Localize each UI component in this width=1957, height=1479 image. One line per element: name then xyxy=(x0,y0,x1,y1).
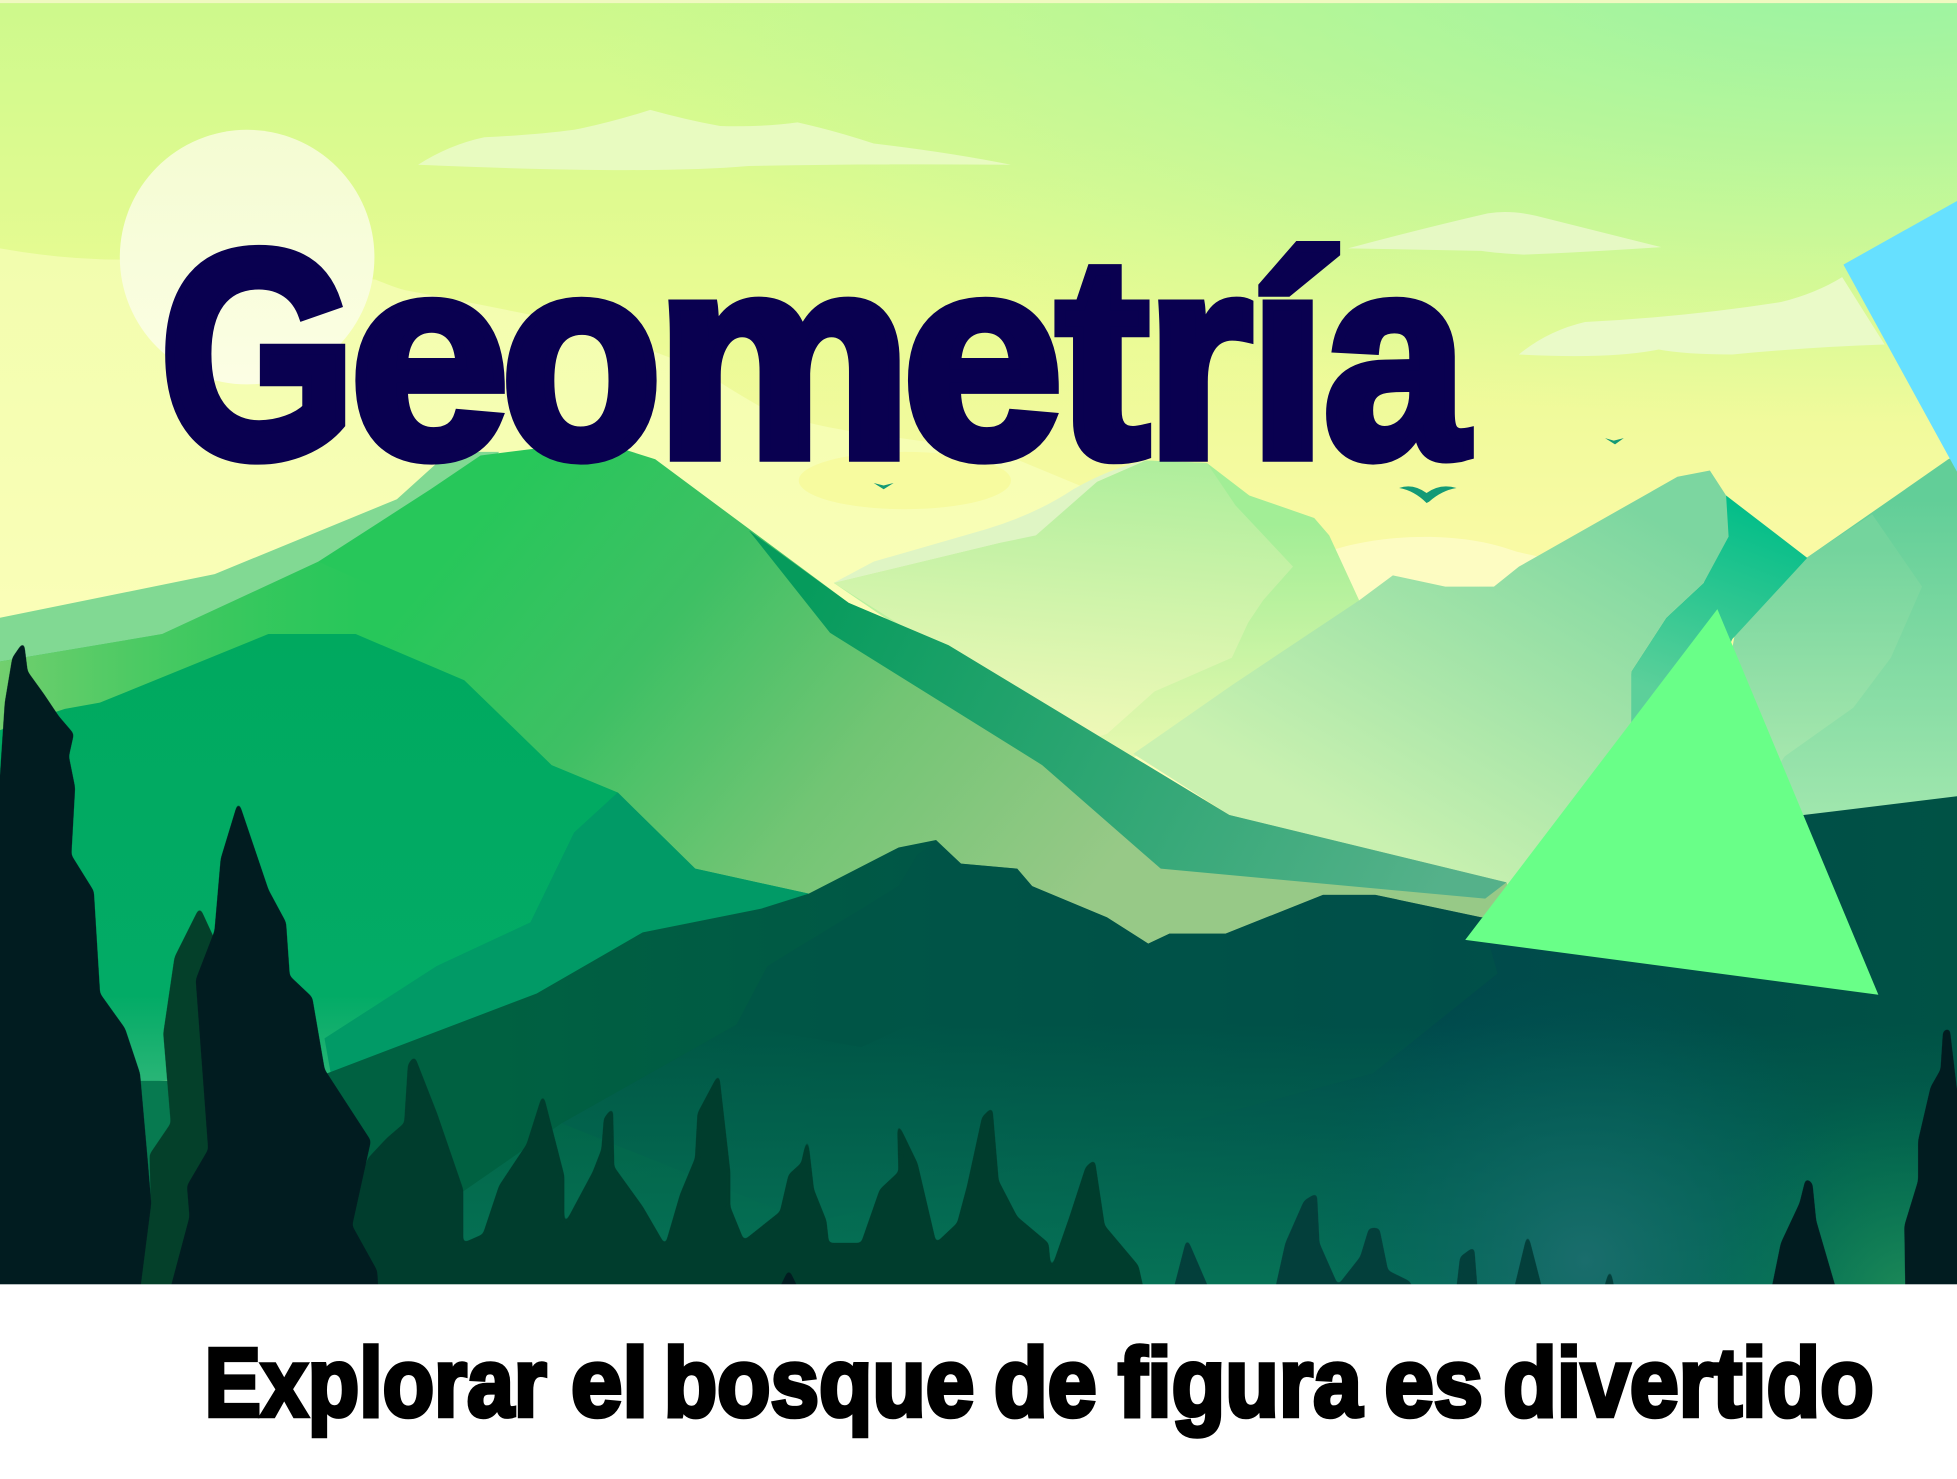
subtitle: figura xyxy=(1118,1328,1363,1437)
title: a xyxy=(1324,197,1469,517)
title: o xyxy=(501,197,662,517)
tree: far left xyxy=(0,642,151,1311)
subtitle: divertido xyxy=(1503,1328,1874,1437)
blue triangle xyxy=(1843,201,1957,472)
mountain: central inner facet xyxy=(834,461,1293,749)
lower left valley xyxy=(0,1081,374,1286)
yellow sky glow xyxy=(799,452,1011,509)
title: í xyxy=(1248,197,1337,517)
mountain: central far xyxy=(834,461,1359,761)
mountain: front left xyxy=(0,634,809,1086)
birds xyxy=(874,438,1624,503)
tree: right edge xyxy=(1905,1028,1957,1311)
mountain: left lit lip xyxy=(0,562,374,749)
mountain: dark ridge xyxy=(749,530,1506,899)
cream cloud behind mountains xyxy=(1335,537,1573,612)
cloud top right xyxy=(1348,212,1661,255)
mountain: teal gully xyxy=(1623,495,1807,774)
mountain: main xyxy=(0,447,1535,998)
sun xyxy=(120,130,374,384)
trees: mid row xyxy=(352,1056,1148,1311)
title: m xyxy=(655,197,912,517)
mountain: mid dark range xyxy=(287,796,1957,1286)
mountain: mid range shaded facet xyxy=(562,841,1498,1223)
subtitle: bosque xyxy=(664,1328,974,1437)
title: t xyxy=(1057,197,1149,517)
subtitle: el xyxy=(571,1328,648,1437)
green glow xyxy=(1697,1073,1957,1286)
mountain: right light facet xyxy=(1710,514,1922,811)
pale sky band xyxy=(0,248,1248,799)
white footer band xyxy=(0,1284,1957,1479)
teal glow xyxy=(1248,974,1957,1286)
tree: bottom bump xyxy=(769,1269,809,1311)
foreground slope lighter xyxy=(327,974,1957,1286)
subtitle: de xyxy=(994,1328,1097,1437)
green triangle xyxy=(1465,609,1878,995)
subtitle: es xyxy=(1385,1328,1483,1437)
trees: small distant row xyxy=(1168,1193,1619,1311)
title: G xyxy=(160,190,356,519)
trees: dark left pair and right silhouettes xyxy=(0,642,1957,1311)
title: e xyxy=(902,197,1063,517)
title: r xyxy=(1146,197,1252,517)
mountain: back left xyxy=(0,452,499,668)
pale ribbon on central mountain xyxy=(834,461,1146,583)
cloud top left xyxy=(418,110,1011,170)
mountain: far right xyxy=(1647,456,1957,1286)
mountain: far right light slope xyxy=(1133,471,1729,886)
tree: bottom right small xyxy=(1767,1178,1842,1311)
cloud right xyxy=(1519,277,1885,356)
subtitle: Explorar xyxy=(205,1328,547,1437)
tree: behind left xyxy=(131,907,218,1311)
mountain: front left shaded facet xyxy=(325,793,809,1073)
title: e xyxy=(350,197,509,517)
tree: second left xyxy=(165,801,379,1311)
